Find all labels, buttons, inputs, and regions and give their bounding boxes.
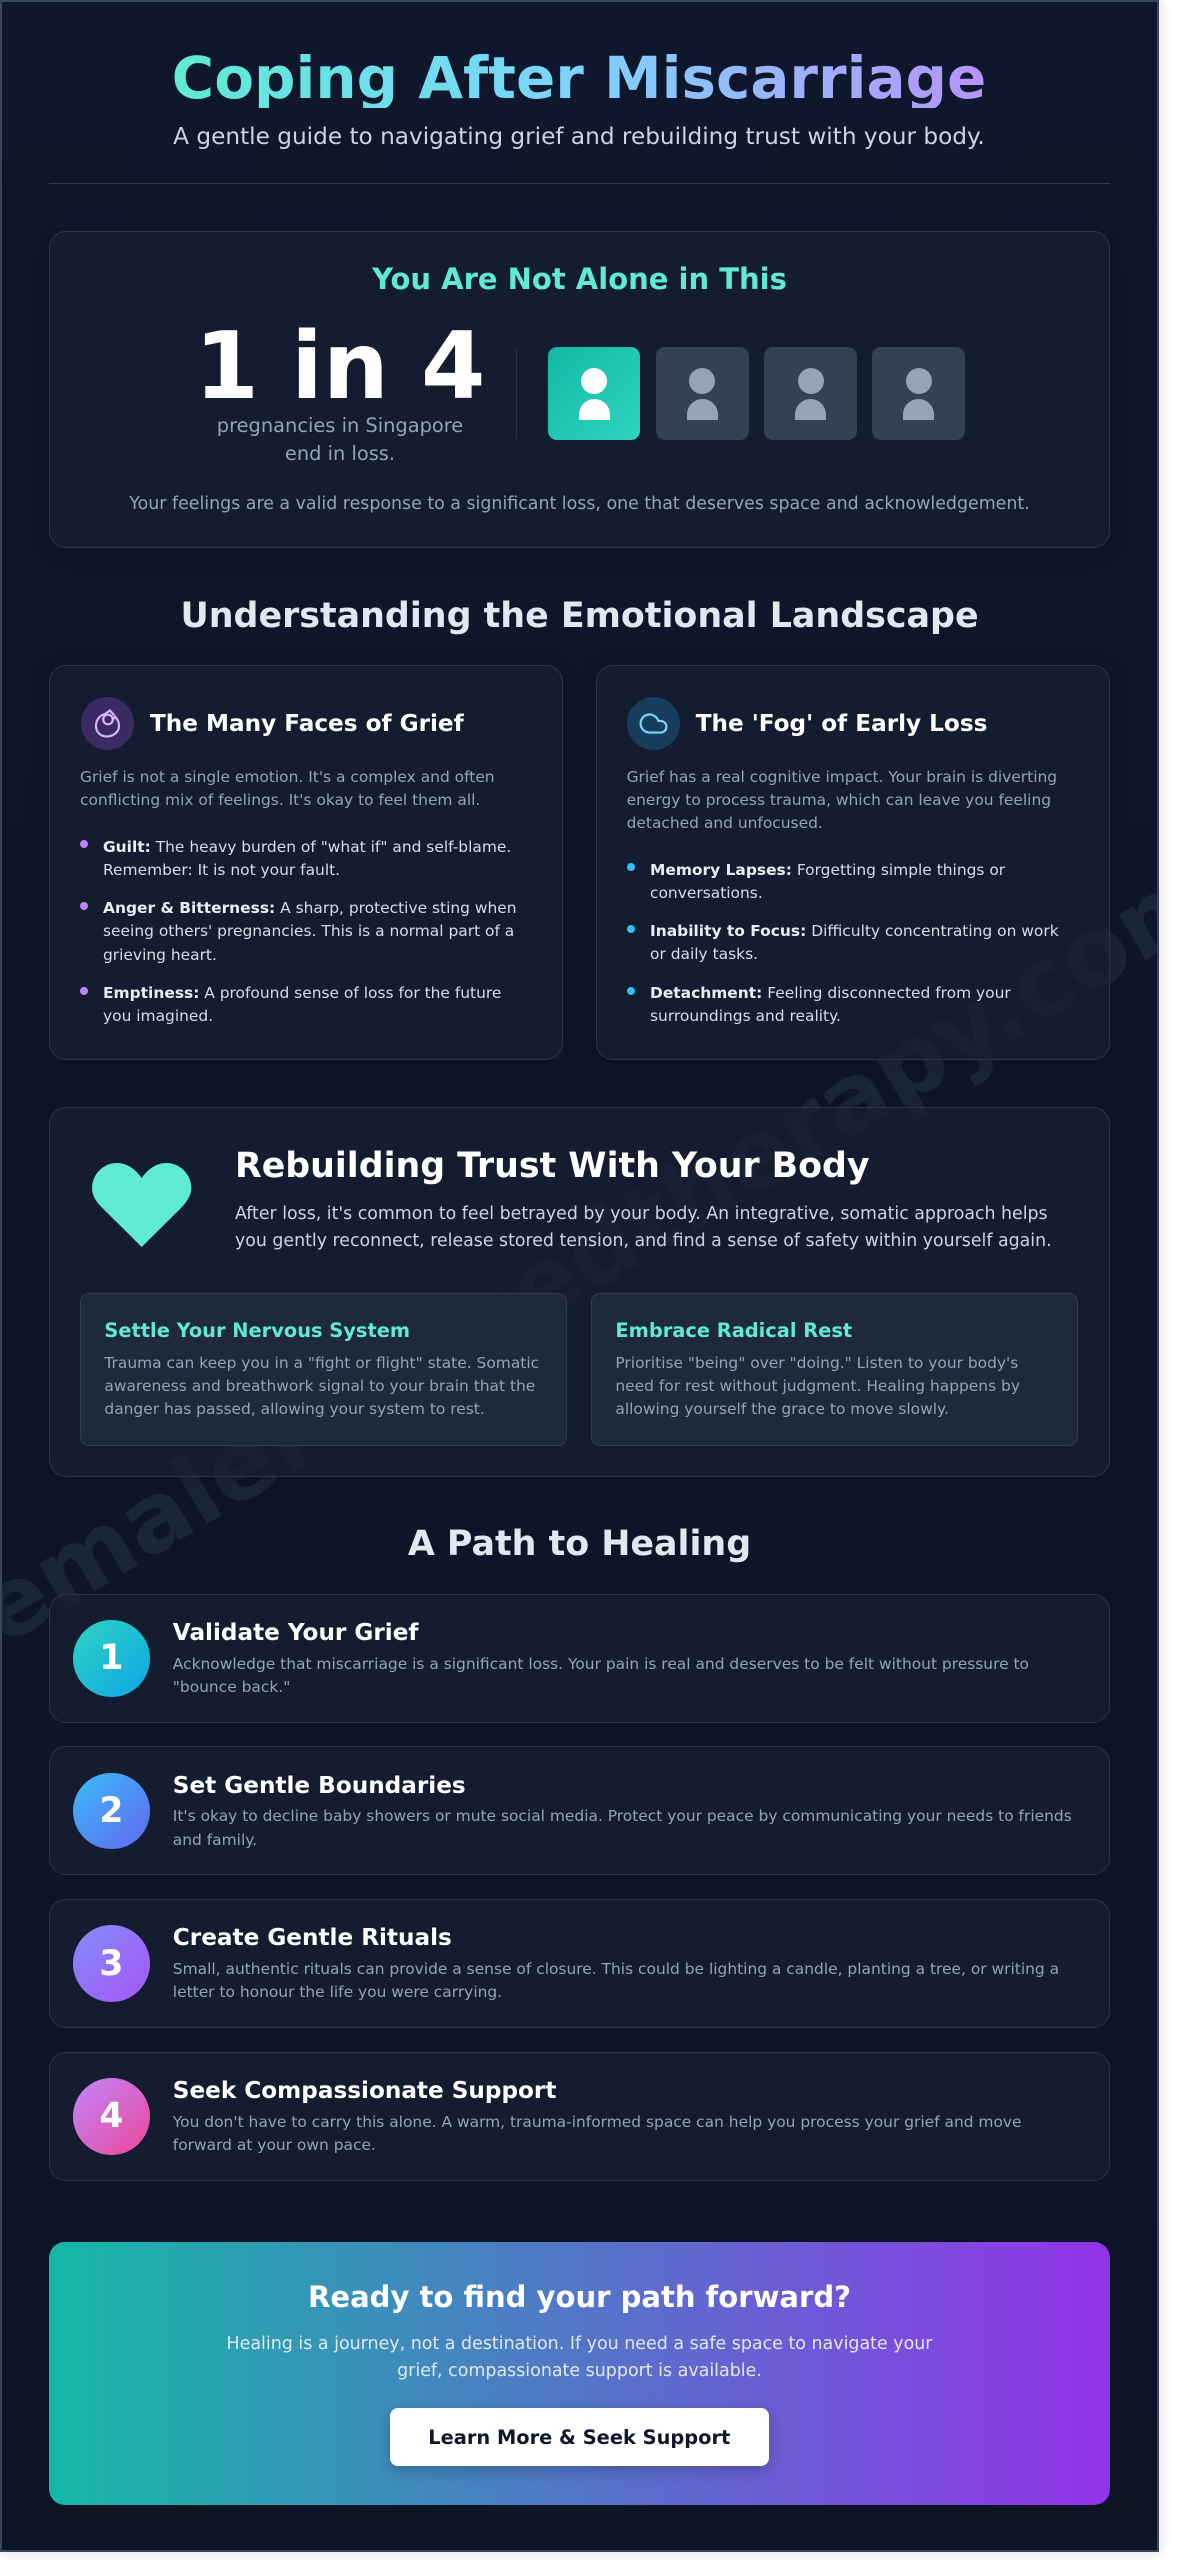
number badge 1	[73, 1620, 150, 1697]
list item: emptiness: you imagined.	[103, 1007, 213, 1025]
sub-card text: awareness and breathwork signal to your brain that the	[104, 1377, 535, 1395]
icon: person	[872, 347, 965, 440]
heading: path to healing: A Path to Healing	[408, 1524, 751, 1564]
panel: many faces of grief	[49, 665, 563, 1060]
list: cognitive effects	[627, 861, 1059, 1025]
statistic caption: end in loss.	[285, 442, 395, 465]
step text	[172, 2113, 1022, 2154]
bullet	[627, 863, 635, 871]
list item: guilt: Guilt: The heavy burden of "what if" and self-blame.	[103, 838, 511, 856]
number badge 3	[73, 1925, 150, 2002]
icon: highlighted person	[548, 347, 640, 440]
step text: It's okay to decline baby showers or mute social media. Protect your peace by communicating your needs to friends	[173, 1807, 1072, 1825]
list item: guilt: Remember: It is not your fault.	[103, 861, 340, 879]
icon: cloud	[627, 697, 680, 750]
panel title: Rebuilding Trust With Your Body	[235, 1146, 870, 1186]
step text: You don't have to carry this alone. A warm, trauma-informed space can help you process your grief and move	[173, 2113, 1022, 2131]
icon: heart	[92, 1163, 192, 1247]
bullet	[627, 987, 635, 995]
statistic caption	[217, 414, 463, 465]
step title: Seek Compassionate Support	[173, 2078, 556, 2104]
intro text: energy to process trauma, which can leave you feeling	[627, 791, 1051, 809]
call to action text	[227, 2334, 932, 2381]
panel text: After loss, it's common to feel betrayed by your body. An integrative, somatic approach helps	[235, 1204, 1048, 1224]
number badge 1: 1	[99, 1638, 123, 1678]
list item: detachment: Detachment: Feeling disconnected from your	[650, 984, 1011, 1002]
list item: emptiness: Emptiness: A profound sense of loss for the future	[103, 984, 501, 1002]
bullet	[80, 840, 88, 848]
sub-card text: Prioritise "being" over "doing." Listen to your body's	[615, 1354, 1018, 1372]
step text: "bounce back."	[173, 1678, 290, 1696]
icon: person	[764, 347, 857, 440]
call to action title: Ready to find your path forward?	[308, 2280, 851, 2314]
step title: Create Gentle Rituals	[173, 1925, 452, 1951]
panel: you are not alone	[49, 231, 1110, 548]
intro text: detached and unfocused.	[627, 814, 823, 832]
call to action text: grief, compassionate support is available.	[397, 2361, 762, 2381]
step text: forward at your own pace.	[173, 2136, 376, 2154]
intro text: Grief has a real cognitive impact. Your brain is diverting	[627, 768, 1057, 786]
number badge 4: 4	[99, 2096, 123, 2136]
heading: emotional landscape: Understanding the Emotional Landscape	[180, 596, 979, 636]
list item: anger: grieving heart.	[103, 946, 217, 964]
number badge 3: 3	[99, 1944, 123, 1984]
sub-card title: Settle Your Nervous System	[104, 1319, 410, 1342]
bullet	[80, 987, 88, 995]
sub-card: nervous system	[80, 1293, 567, 1446]
sub-card text: allowing yourself the grace to move slowly.	[615, 1400, 949, 1418]
card title: The 'Fog' of Early Loss	[696, 711, 987, 737]
sub-card text: Trauma can keep you in a "fight or flight" state. Somatic	[104, 1354, 539, 1372]
step text	[172, 1655, 1029, 1696]
step text: letter to honour the life you were carrying.	[173, 1983, 502, 2001]
sub-card text	[104, 1354, 539, 1418]
icon: person	[656, 347, 749, 440]
bullet	[80, 902, 88, 910]
list: grief feelings	[80, 838, 517, 1025]
step title: Set Gentle Boundaries	[173, 1773, 466, 1799]
button	[390, 2408, 769, 2466]
card title: The Many Faces of Grief	[150, 711, 464, 737]
step 3	[49, 1899, 1110, 2028]
step title: Validate Your Grief	[173, 1620, 418, 1646]
list item: memory lapses: Memory Lapses: Forgetting simple things or	[650, 861, 1005, 879]
bullet	[627, 925, 635, 933]
step text	[173, 1960, 1059, 2001]
list item: inability to focus: Inability to Focus: Difficulty concentrating on work	[650, 922, 1059, 940]
step text	[173, 1807, 1072, 1849]
button: Learn More & Seek Support	[428, 2426, 730, 2449]
panel: rebuilding trust	[49, 1107, 1110, 1477]
list item: memory lapses: conversations.	[650, 884, 763, 902]
call to action panel	[49, 2242, 1110, 2505]
call to action text: Healing is a journey, not a destination. If you need a safe space to navigate your	[227, 2334, 932, 2354]
number badge 2: 2	[99, 1791, 123, 1831]
panel: fog of early loss	[596, 665, 1110, 1060]
step text: and family.	[173, 1831, 257, 1849]
sub-card: radical rest	[591, 1293, 1078, 1446]
panel text	[235, 1204, 1052, 1251]
sub-card text: danger has passed, allowing your system to rest.	[104, 1400, 485, 1418]
step text: Small, authentic rituals can provide a sense of closure. This could be lighting a candle, planting a tree, or writing a	[173, 1960, 1059, 1978]
list item: inability to focus	[650, 922, 1059, 963]
step 4	[49, 2052, 1110, 2181]
sub-card text	[615, 1354, 1020, 1418]
statistic: 1 in 4: 1 in 4	[194, 312, 485, 420]
list item: emptiness	[103, 984, 501, 1025]
panel text: you gently reconnect, release stored tension, and find a sense of safety within yourself again.	[235, 1231, 1052, 1251]
intro text: Grief is not a single emotion. It's a complex and often	[80, 768, 495, 786]
list item: anger: Anger & Bitterness: A sharp, protective sting when	[103, 899, 517, 917]
sub-card title: Embrace Radical Rest	[615, 1319, 852, 1342]
intro text	[627, 768, 1057, 832]
intro text	[80, 768, 495, 809]
number badge 4	[73, 2078, 150, 2155]
list item: anger	[103, 899, 517, 964]
list item: detachment	[650, 984, 1011, 1025]
intro text: conflicting mix of feelings. It's okay to feel them all.	[80, 791, 480, 809]
icon: grief	[81, 697, 134, 750]
subtitle: A gentle guide to navigating grief and rebuilding trust with your body.	[173, 123, 985, 150]
list item: guilt	[103, 838, 511, 879]
step 2	[49, 1746, 1110, 1875]
pictogram: one of four highlighted	[548, 347, 965, 440]
list item: inability to focus: or daily tasks.	[650, 945, 758, 963]
statistic caption: pregnancies in Singapore	[217, 414, 463, 437]
list item: anger: seeing others' pregnancies. This is a normal part of a	[103, 922, 514, 940]
title: Coping After Miscarriage	[172, 44, 986, 112]
sub-card text: need for rest without judgment. Healing happens by	[615, 1377, 1020, 1395]
list item: memory lapses	[650, 861, 1006, 902]
list item: detachment: surroundings and reality.	[650, 1007, 841, 1025]
step 1	[49, 1594, 1110, 1723]
number badge 2	[73, 1773, 150, 1849]
supporting note: Your feelings are a valid response to a significant loss, one that deserves space and acknowledgement.	[129, 494, 1030, 514]
step text: Acknowledge that miscarriage is a significant loss. Your pain is real and deserves to be felt without pressure to	[173, 1655, 1029, 1673]
panel heading: You Are Not Alone in This	[372, 262, 787, 296]
